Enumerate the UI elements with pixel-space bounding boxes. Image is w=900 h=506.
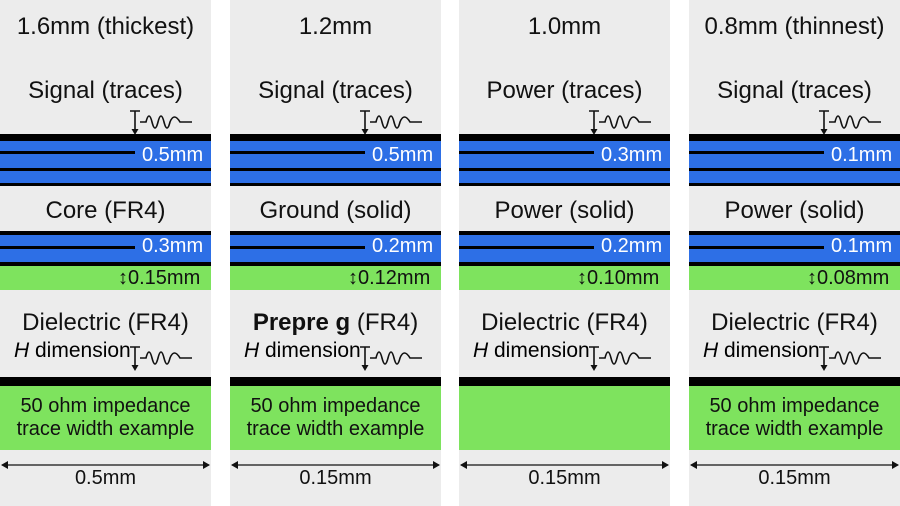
panel: 1.6mm: H dimension (14, 339, 131, 362)
stack (230, 134, 441, 141)
panel: 1.2mm: 0.2mm (372, 235, 433, 257)
panel: 1.0mm: ↕0.10mm (577, 267, 659, 289)
panel: 0.8mm: 0.15mm (758, 467, 831, 489)
trace width box (0, 386, 211, 450)
panel: 1.6mm: 0.5mm (142, 144, 203, 166)
width dimension (231, 461, 440, 469)
label: power solid: Power (solid) (724, 197, 865, 224)
panel: 1.6mm: ↕0.15mm (118, 267, 200, 289)
panel: 1.2mm: ↕0.12mm (348, 267, 430, 289)
wave icon (819, 110, 881, 134)
label: signal layer: Signal (traces) (717, 77, 872, 104)
heading: 1.2mm (299, 13, 372, 40)
panel: 1.2mm (230, 0, 441, 506)
width dimension (690, 461, 899, 469)
panel: 0.8mm: 0.1mm (831, 144, 892, 166)
panel: 0.8mm: trace width example (706, 418, 883, 440)
label: dielectric: Dielectric (FR4) (22, 309, 189, 336)
label: dielectric: Dielectric (FR4) (711, 309, 878, 336)
label: ground: Ground (solid) (259, 197, 412, 224)
heading: 1.0mm (528, 13, 601, 40)
panel: 0.8mm: 0.1mm (831, 235, 892, 257)
panel: 1.2mm: 50 ohm impedance (250, 395, 421, 417)
stack: signal copper (0, 134, 211, 141)
panel: 0.8mm: H dimension (703, 339, 820, 362)
panel: 1.6mm: trace width example (17, 418, 194, 440)
panel: 1.6mm: 0.3mm (142, 235, 203, 257)
wave icon (360, 110, 422, 134)
label: power traces: Power (traces) (486, 77, 643, 104)
label: core: Core (FR4) (45, 197, 166, 224)
trace width box (459, 386, 670, 450)
trace width box (689, 386, 900, 450)
heading: 0.8mm (thinnest) (704, 13, 885, 40)
panel: 0.8mm: ↕0.08mm (807, 267, 889, 289)
panel: 1.0mm: 0.15mm (528, 467, 601, 489)
label: signal layer: Signal (traces) (258, 77, 413, 104)
width dimension (1, 461, 210, 469)
panel: 1.6mm (0, 0, 211, 506)
panel: 1.0mm (459, 0, 670, 506)
heading: 1.6mm (thickest) (17, 13, 194, 40)
wave icon (130, 110, 192, 134)
label: prepreg: Prepre g (FR4) (253, 309, 418, 336)
panel: 1.0mm: 0.2mm (601, 235, 662, 257)
stack (459, 134, 670, 141)
panel: 1.6mm: 50 ohm impedance (20, 395, 191, 417)
wave icon (589, 110, 651, 134)
trace width box (230, 386, 441, 450)
label: dielectric: Dielectric (FR4) (481, 309, 648, 336)
panel: 1.2mm: H dimension (244, 339, 361, 362)
panel: 1.0mm: 0.3mm (601, 144, 662, 166)
stack (689, 134, 900, 141)
panel: 0.8mm: 50 ohm impedance (709, 395, 880, 417)
label: signal layer: Signal (traces) (28, 77, 183, 104)
panel: 0.8mm (689, 0, 900, 506)
panel: 1.6mm: 0.5mm (75, 467, 136, 489)
panel: 1.2mm: trace width example (247, 418, 424, 440)
width dimension (460, 461, 669, 469)
panel: 1.2mm: 0.5mm (372, 144, 433, 166)
label: power solid: Power (solid) (494, 197, 635, 224)
panel: 1.0mm: H dimension (473, 339, 590, 362)
panel: 1.2mm: 0.15mm (299, 467, 372, 489)
